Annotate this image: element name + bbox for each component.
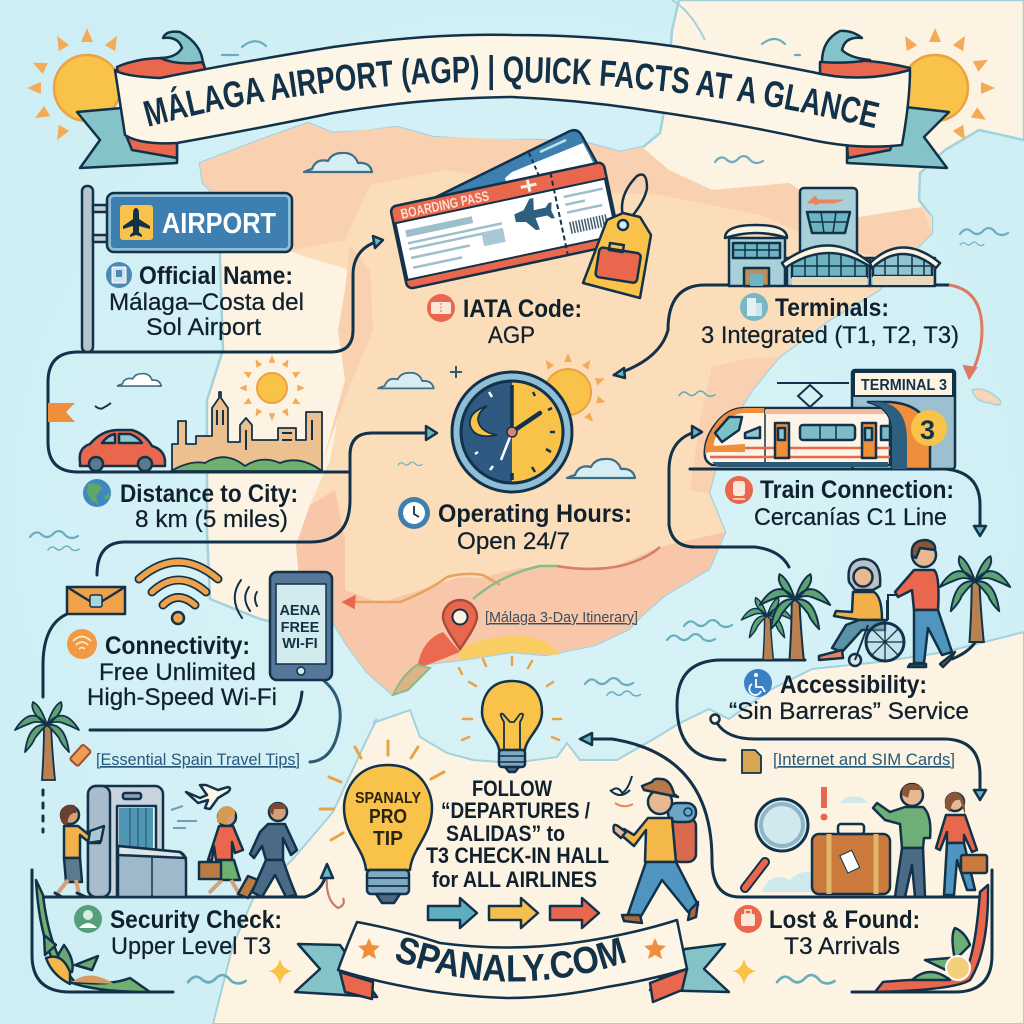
city and car illustration xyxy=(48,355,322,471)
small light bulb xyxy=(459,657,561,772)
icon: sim card xyxy=(742,750,761,773)
tip text: T3 CHECK-IN HALL xyxy=(426,843,609,868)
panel: security check xyxy=(36,785,297,992)
label: Official Name: xyxy=(139,262,293,290)
security scanner illustration xyxy=(88,785,230,897)
icon: train xyxy=(725,476,753,504)
connector lines xyxy=(32,243,992,992)
tip text: FOLLOW xyxy=(472,776,552,801)
arrowheads xyxy=(321,236,986,878)
icon: wheelchair xyxy=(744,669,772,697)
link: malaga itinerary with pin: [Málaga 3-Day Itinerary] xyxy=(485,610,638,626)
decoration: corner leaves xyxy=(875,885,988,992)
icon: suitcase xyxy=(734,905,762,933)
label: Distance to City: xyxy=(120,480,298,508)
link: essential spain travel tips xyxy=(70,744,300,769)
value: Upper Level T3 xyxy=(111,933,271,960)
tip text: “DEPARTURES / xyxy=(441,798,590,823)
panel: distance to city xyxy=(48,355,322,533)
train and terminal 3 illustration xyxy=(705,370,955,469)
wheelchair and helper illustration xyxy=(819,540,955,667)
value line two: High-Speed Wi-Fi xyxy=(87,684,277,711)
icon: clock xyxy=(398,497,430,529)
website: SPANALY.COM xyxy=(396,937,626,982)
boarding passes illustration xyxy=(390,130,651,298)
icon: map pin xyxy=(443,600,477,649)
pro tip bulb: PRO xyxy=(369,806,407,828)
footer banner xyxy=(294,918,730,1004)
decoration: sparkles xyxy=(268,958,757,985)
value: Open 24/7 xyxy=(457,528,570,555)
value: 3 Integrated (T1, T2, T3) xyxy=(701,322,959,349)
label: Accessibility: xyxy=(780,671,927,699)
label: Connectivity: xyxy=(105,632,250,660)
terminal buildings illustration xyxy=(725,188,940,286)
wifi symbol xyxy=(139,562,257,624)
value: Cercanías C1 Line xyxy=(754,504,947,531)
phone illustration xyxy=(270,572,332,680)
train and terminal 3 illustration: 3 xyxy=(920,415,935,445)
clock illustration xyxy=(450,366,572,492)
panel: terminals xyxy=(701,188,959,349)
link: internet and sim cards: [Internet and SIM Cards] xyxy=(773,750,955,769)
pro tip bulb: SPANALY xyxy=(355,790,421,807)
airport sign: AIRPORT xyxy=(162,208,276,240)
value: “Sin Barreras” Service xyxy=(729,698,969,725)
label: Operating Hours: xyxy=(438,500,632,528)
pro tip bulb: TIP xyxy=(373,828,403,850)
icon: envelope xyxy=(67,587,125,614)
boarding passes illustration: BOARDING PASS xyxy=(399,187,490,222)
tip text: for ALL AIRLINES xyxy=(432,867,597,892)
value: AGP xyxy=(488,322,535,349)
decoration: corner leaves xyxy=(36,880,150,992)
panel: operating hours xyxy=(398,353,632,555)
link: malaga itinerary with pin xyxy=(443,600,638,649)
value line two: Sol Airport xyxy=(146,314,261,341)
icon: building xyxy=(740,293,768,321)
label: Train Connection: xyxy=(760,476,954,504)
direction arrows xyxy=(428,898,599,928)
icon: wifi badge xyxy=(67,629,97,659)
label: Security Check: xyxy=(110,906,282,934)
panel: connectivity xyxy=(67,562,332,711)
value: T3 Arrivals xyxy=(784,933,900,960)
tip text: SALIDAS” to xyxy=(446,821,565,846)
value: Free Unlimited xyxy=(99,659,256,686)
palm tree left xyxy=(15,702,79,780)
pro tip xyxy=(320,657,698,928)
train and terminal 3 illustration: TERMINAL 3 xyxy=(861,377,947,394)
icon: luggage tag xyxy=(70,744,91,766)
tip text xyxy=(426,776,609,892)
label: Terminals: xyxy=(775,294,889,322)
phone illustration: AENA xyxy=(279,603,321,619)
icon: stars xyxy=(358,938,666,959)
airport sign xyxy=(82,186,292,352)
link: essential spain travel tips: [Essential Spain Travel Tips] xyxy=(96,750,300,769)
panel: iata code xyxy=(390,130,651,349)
icon: right sun xyxy=(900,28,995,143)
hiker illustration xyxy=(610,776,698,923)
icon: left sun xyxy=(27,28,122,143)
title banner xyxy=(76,30,950,170)
label: IATA Code: xyxy=(463,295,582,323)
panel: train connection xyxy=(705,370,955,531)
value: 8 km (5 miles) xyxy=(135,506,288,533)
label: Lost & Found: xyxy=(769,906,920,934)
value: Málaga–Costa del xyxy=(109,289,304,316)
panel: official name xyxy=(82,186,304,352)
panel: lost and found xyxy=(734,784,988,992)
pro tip bulb xyxy=(320,741,444,903)
link: internet and sim cards xyxy=(742,750,955,773)
lost luggage illustration xyxy=(745,784,987,897)
heading: MÁLAGA AIRPORT (AGP) | QUICK FACTS AT A GLANCE xyxy=(143,55,880,128)
icon: security xyxy=(74,905,102,933)
icon: id badge xyxy=(106,262,132,288)
palm trees xyxy=(741,556,1010,660)
phone illustration: FREE xyxy=(281,620,320,636)
panel: accessibility xyxy=(729,540,1010,725)
people at security xyxy=(55,803,297,898)
icon: globe xyxy=(83,479,111,507)
phone illustration: WI-FI xyxy=(282,636,318,652)
icon: small sun behind clock xyxy=(542,353,607,424)
icon: ticket xyxy=(427,294,455,322)
